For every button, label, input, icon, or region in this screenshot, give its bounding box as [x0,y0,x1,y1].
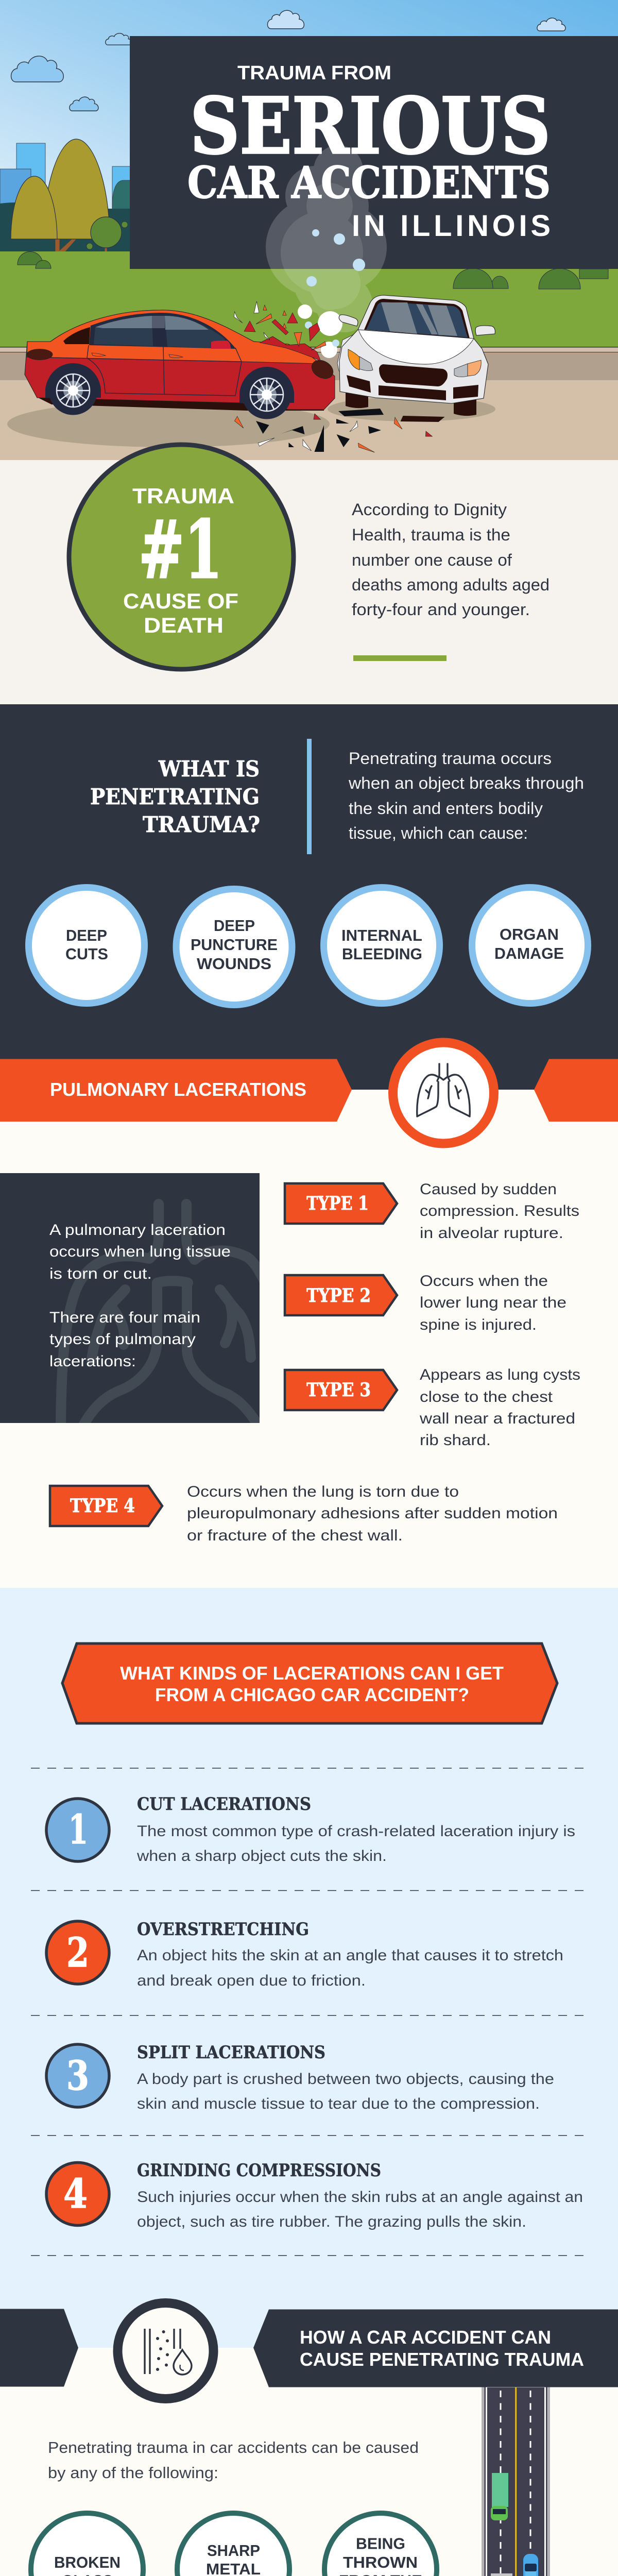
title [187,62,551,243]
type 1: compression. Results [420,1202,579,1219]
type 3: wall near a fractured [419,1410,575,1427]
banner: how a car accident can cause penetrating trauma [0,2309,618,2387]
circle: sharp metal parts [177,2513,289,2576]
item 4: grinding compressions: object, such as tire rubber. The grazing pulls the skin. [137,2213,526,2230]
circle: deep cuts: DEEP [66,926,107,944]
circle: internal bleeding: BLEEDING [342,945,422,963]
type 4: or fracture of the chest wall. [187,1527,403,1544]
illustration: smoke [266,145,387,358]
item 4: grinding compressions: GRINDING COMPRESSIONS [137,2160,381,2181]
banner: how a car accident can cause penetrating trauma: HOW A CAR ACCIDENT CAN [300,2327,551,2348]
heading banner: FROM A CHICAGO CAR ACCIDENT? [155,1684,469,1705]
circle: deep puncture wounds: PUNCTURE [191,936,278,954]
panel: kinds of lacerations [0,1588,618,2349]
text block [348,749,584,842]
panel: pulmonary laceration definition [0,1173,265,1437]
icon: front wheel [242,370,291,419]
icon: bushes [18,251,608,289]
type 1: in alveolar rupture. [420,1225,563,1242]
heading: TRAUMA? [143,812,260,837]
illustration: white car [337,295,495,416]
banner: how a car accident can cause penetrating trauma: CAUSE PENETRATING TRAUMA [300,2349,584,2370]
circle: organ damage: DAMAGE [494,944,564,962]
icon: trees [11,139,128,268]
text block: the skin and enters bodily [349,799,543,818]
panel: how a car accident section background [0,2348,618,2576]
circle: deep puncture wounds [176,889,292,1005]
circle: deep puncture wounds: DEEP [214,917,255,935]
item 4: grinding compressions: 4 [63,2171,88,2217]
type 2: spine is injured. [420,1316,537,1333]
item 3: split lacerations: A body part is crushed between two objects, causing the [137,2071,554,2088]
item 2: overstretching: OVERSTRETCHING [137,1919,309,1940]
item 1: cut lacerations: CUT LACERATIONS [137,1794,311,1815]
type 1: Caused by sudden [420,1181,557,1198]
icon: clouds [11,10,565,111]
type 2: TYPE 2 [306,1285,371,1307]
item 3: split lacerations [46,2042,554,2112]
circle: broken glass [31,2513,143,2576]
item 2: overstretching: An object hits the skin at an angle that causes it to stretch [137,1947,563,1964]
circle: internal bleeding [323,887,440,1004]
circle: being thrown from the car: BEING [356,2535,405,2552]
circle: being thrown from the car [324,2513,437,2576]
type 4: pleuropulmonary adhesions after sudden motion [187,1505,558,1522]
heading [90,756,260,837]
text block: penetrating trauma causes intro: Penetrating trauma in car accidents can be caused [48,2438,419,2456]
text block: dignity health: Health, trauma is the [352,526,510,544]
heading banner [62,1643,557,1723]
circle: internal bleeding: INTERNAL [341,926,422,944]
type 2 [285,1273,566,1333]
stat circle: CAUSE OF [123,589,238,613]
type 4: TYPE 4 [70,1495,135,1517]
panel: title block [130,36,618,269]
item 3: split lacerations: 3 [66,2053,89,2099]
item 1: cut lacerations: 1 [68,1806,88,1853]
type 4: Occurs when the lung is torn due to [187,1483,459,1500]
icon: rear wheel [48,366,98,415]
title: TRAUMA FROM [237,62,391,84]
text block: tissue, which can cause: [349,824,528,842]
banner: pulmonary lacerations: PULMONARY LACERATIONS [50,1079,306,1100]
illustration: highway interchange [482,2387,550,2576]
text block: dignity health: number one cause of [352,551,512,569]
circle: broken glass: BROKEN [54,2553,121,2571]
type 3: Appears as lung cysts [420,1366,580,1383]
item 2: overstretching [46,1919,563,1989]
circle: sharp metal parts: SHARP [207,2541,260,2560]
panel: pulmonary lacerations section background [0,1090,618,1588]
text block: penetrating trauma causes intro [48,2438,419,2482]
text block: is torn or cut. [49,1265,152,1282]
item 4: grinding compressions: Such injuries occur when the skin rubs at an angle against an [137,2189,583,2206]
stat circle: DEATH [144,613,224,637]
panel: hero illustration [0,0,618,460]
text block: A pulmonary laceration [49,1222,226,1239]
title: SERIOUS [190,81,551,172]
item 3: split lacerations: SPLIT LACERATIONS [137,2042,325,2063]
text block: lacerations: [49,1353,136,1370]
circle: deep cuts [29,887,144,1004]
banner: pulmonary lacerations [0,1059,618,1122]
illustration: crash debris [234,301,445,452]
icon: city skyline [0,143,133,252]
text block: dignity health [352,500,550,619]
text block: penetrating trauma causes intro: by any of the following: [48,2464,218,2482]
type 3: rib shard. [420,1432,491,1449]
text block: dignity health: forty-four and younger. [352,600,530,619]
type 3: TYPE 3 [306,1379,371,1401]
icon: lungs watermark [61,1204,265,1437]
item 1: cut lacerations: The most common type of crash-related laceration injury is [137,1823,575,1840]
illustration: red car [7,310,495,447]
item 1: cut lacerations [46,1794,575,1865]
text block [49,1222,231,1370]
title: IN ILLINOIS [352,209,551,243]
circle: organ damage [472,887,588,1004]
stat circle: TRAUMA [132,484,234,508]
type 2: Occurs when the [420,1273,548,1290]
circle: deep cuts: CUTS [65,945,108,963]
sidewalk [0,347,618,352]
type 4 [50,1483,558,1544]
stat circle: #1 [139,502,222,597]
circle: organ damage: ORGAN [500,925,559,943]
grass [0,251,618,347]
type 1 [285,1181,579,1242]
icon: penetrating object and blood drop badge [117,2303,213,2399]
type 2: lower lung near the [420,1294,566,1311]
panel: number one cause [0,445,618,704]
text block: dignity health: According to Dignity [352,500,507,519]
heading banner: WHAT KINDS OF LACERATIONS CAN I GET [120,1663,504,1684]
road surface [0,380,618,460]
text block: types of pulmonary [49,1331,196,1348]
text block: dignity health: deaths among adults aged [352,575,550,594]
text block: occurs when lung tissue [49,1243,231,1260]
lane markings [0,2387,618,2576]
circle: deep puncture wounds: WOUNDS [197,955,271,973]
panel: what is penetrating trauma [0,704,618,1090]
type 3: close to the chest [420,1388,553,1405]
title: CAR ACCIDENTS [187,157,551,208]
text block: when an object breaks through [348,774,584,792]
type 1: TYPE 1 [306,1193,369,1214]
heading: PENETRATING [90,784,260,809]
item 2: overstretching: 2 [66,1929,89,1976]
item 4: grinding compressions [46,2160,583,2230]
icon: vehicles [53,2473,603,2576]
item 3: split lacerations: skin and muscle tissue to tear due to the compression. [137,2095,540,2112]
text block: Penetrating trauma occurs [349,749,552,768]
item 1: cut lacerations: when a sharp object cuts the skin. [136,1848,387,1865]
text block: There are four main [49,1309,200,1326]
stat circle [69,445,294,669]
type 3 [285,1366,580,1449]
icon: lungs badge [393,1043,494,1144]
item 2: overstretching: and break open due to friction. [137,1972,366,1989]
circle: being thrown from the car: THROWN [343,2553,418,2571]
heading: WHAT IS [158,756,260,782]
